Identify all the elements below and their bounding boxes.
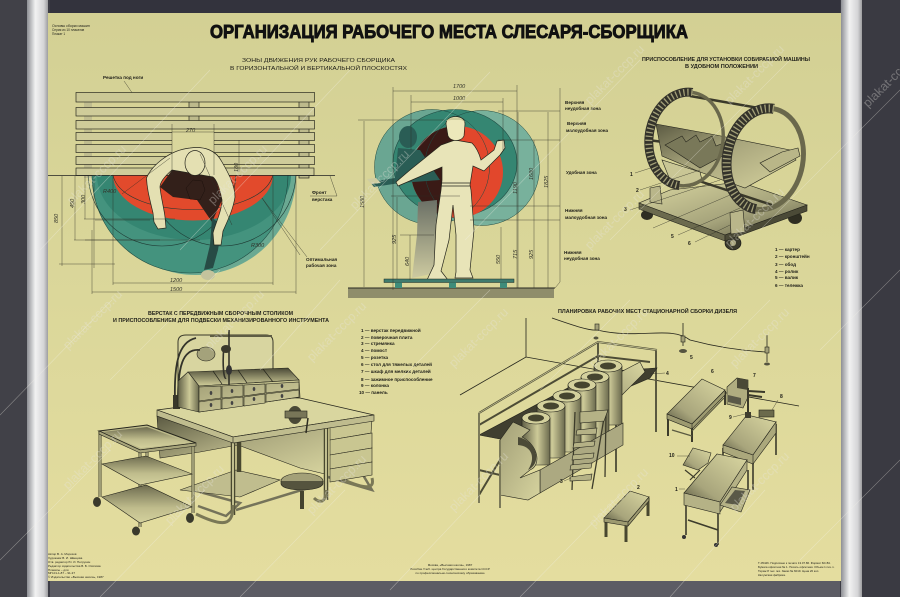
tool hoses bbox=[175, 338, 200, 400]
heading: workbench: ВЕРСТАК С ПЕРЕДВИЖНЫМ СБОРОЧНЫМ СТОЛИКОМ bbox=[148, 311, 293, 317]
legend: workbench parts: 5 — розетка bbox=[361, 355, 389, 360]
callout numbers bbox=[624, 165, 740, 247]
table 1 mobile workbench bbox=[675, 454, 750, 547]
zone labels: Верхняя bbox=[567, 121, 587, 126]
zone labels: Верхняя bbox=[565, 100, 585, 105]
publisher note bottom center: Москва, «Высшая школа», 1987 bbox=[428, 563, 473, 567]
zone labels bbox=[564, 100, 609, 261]
website watermarks: plakat-cccp.ru bbox=[347, 147, 412, 212]
vertical plane dimensions: 640 bbox=[405, 256, 411, 266]
legend: fixture parts: 6 — тележка bbox=[775, 283, 803, 288]
website watermarks: plakat-cccp.ru bbox=[727, 305, 792, 370]
assembly platform frame, back bbox=[479, 342, 657, 472]
website watermarks: plakat-cccp.ru bbox=[60, 427, 125, 492]
print data bottom right: Бумага офсетная № 1. Печать офсетная. Объем 1 печ.л. bbox=[758, 565, 835, 569]
parts bin cabinet bbox=[188, 368, 299, 386]
stepladder bbox=[560, 410, 608, 490]
website watermarks: plakat-cccp.ru bbox=[727, 449, 792, 514]
publisher note bottom center bbox=[410, 563, 490, 575]
vertical plane dimensions: 1700 bbox=[453, 84, 466, 90]
callout numbers: 2 bbox=[636, 188, 639, 194]
horizontal plane dimensions: 450 bbox=[70, 198, 76, 208]
platform and floor bbox=[348, 279, 555, 298]
walls floor and power cable: 5 bbox=[690, 355, 693, 361]
suspended power tool bbox=[223, 330, 229, 385]
label: workbench front bbox=[310, 176, 337, 202]
left hoop bbox=[643, 87, 729, 191]
legend: workbench parts: 1 — верстак передвижной bbox=[361, 327, 421, 333]
table top bbox=[157, 397, 374, 437]
legend: fixture parts bbox=[775, 247, 810, 288]
floor rails bbox=[198, 470, 372, 516]
credits bottom left: Художник В. И. Швецова bbox=[48, 556, 83, 560]
zone labels: Удобная зона bbox=[566, 169, 597, 175]
website watermarks: plakat-cccp.ru bbox=[586, 305, 651, 370]
legend: workbench parts: 6 — стол для тяжелых деталей bbox=[361, 361, 432, 367]
label: optimal working zone: Оптимальная bbox=[306, 257, 337, 262]
website watermarks: plakat-cccp.ru bbox=[205, 142, 270, 207]
vertical plane dimensions: 1000 bbox=[453, 96, 466, 102]
table 8 with column 9 and clamp: 8 bbox=[780, 394, 783, 400]
horizontal plane dimensions: 180 bbox=[234, 162, 240, 172]
legend: workbench parts: 10 — панель bbox=[359, 390, 388, 395]
workbench bbox=[157, 330, 374, 523]
heading: fixture: ПРИСПОСОБЛЕНИЕ ДЛЯ УСТАНОВКИ СОБИРАЕМОЙ МАШИНЫ bbox=[642, 55, 810, 63]
zone circles bbox=[374, 110, 540, 230]
credits bottom left: Редактор издательства В. Б. Осипова bbox=[48, 564, 101, 568]
legend: workbench parts: 8 — зажимное приспособление bbox=[361, 376, 433, 382]
assembly platform rails, front: 4 bbox=[666, 371, 669, 377]
cabinet 7 for small parts bbox=[727, 373, 756, 408]
horizontal plane dimensions: R400 bbox=[103, 189, 117, 195]
stepladder: 3 bbox=[560, 479, 563, 485]
series caption top left: Плакат 1 bbox=[52, 32, 65, 36]
horizontal plane dimensions: 1500 bbox=[170, 287, 183, 293]
cabinet 7 for small parts: 7 bbox=[753, 373, 756, 379]
zone labels: неудобная зона bbox=[564, 255, 600, 261]
vertical plane dimensions: 715 bbox=[513, 249, 519, 259]
heading: zones of arm movement bbox=[230, 58, 407, 72]
website watermarks: plakat-cccp.ru bbox=[60, 287, 125, 352]
callout numbers: 1 bbox=[630, 172, 633, 178]
vertical plane dimensions: 550 bbox=[496, 254, 502, 264]
zone labels: малоудобная зона bbox=[565, 214, 608, 220]
series caption top left: Основы сборки машин bbox=[52, 24, 90, 28]
panel: arm movement zones, vertical plane bbox=[348, 84, 609, 298]
vertical plane dimensions: 925 bbox=[529, 249, 535, 259]
callout numbers: 5 bbox=[671, 234, 674, 240]
worker seen from the back bbox=[396, 116, 505, 280]
horizontal plane dimensions: R300 bbox=[251, 243, 265, 249]
print data bottom right bbox=[758, 561, 835, 577]
heading: zones of arm movement: ЗОНЫ ДВИЖЕНИЯ РУК РАБОЧЕГО СБОРЩИКА bbox=[242, 58, 395, 64]
website watermarks: plakat-cccp.ru bbox=[64, 142, 129, 207]
diesel cylinders bbox=[522, 360, 622, 465]
publisher note bottom center: Пособие Учеб. центра Государственного комитета СССР bbox=[410, 567, 490, 571]
panel: workbench with mobile table bbox=[93, 311, 433, 536]
heading: layout: ПЛАНИРОВКА РАБОЧИХ МЕСТ СТАЦИОНАРНОЙ СБОРКИ ДИЗЕЛЯ bbox=[558, 307, 737, 315]
walls floor and power cable bbox=[460, 318, 799, 406]
credits bottom left bbox=[48, 552, 104, 579]
panel 10 bbox=[669, 448, 711, 480]
heading: workbench: И ПРИСПОСОБЛЕНИЕМ ДЛЯ ПОДВЕСКИ МЕХАНИЗИРОВАННОГО ИНСТРУМЕНТА bbox=[113, 318, 329, 324]
zone labels: малоудобная зона bbox=[566, 127, 609, 133]
website watermarks: plakat-cccp.ru bbox=[446, 449, 511, 514]
website watermarks: plakat-cccp.ru bbox=[202, 287, 267, 352]
vertical plane dimensions: 1580 bbox=[360, 195, 366, 208]
panel: layout of diesel assembly workplaces bbox=[460, 307, 799, 547]
label: foot grating bbox=[103, 75, 143, 94]
stool bbox=[281, 473, 323, 489]
series caption top left: Серия из 10 плакатов bbox=[52, 28, 85, 32]
vertical plane dimensions bbox=[358, 84, 560, 290]
website watermarks: plakat-cccp.ru bbox=[722, 42, 787, 107]
right hoop bbox=[719, 102, 811, 216]
legend: fixture parts: 2 — кронштейн bbox=[775, 253, 810, 259]
website watermarks: plakat-cccp.ru bbox=[582, 187, 647, 252]
website watermarks: plakat-cccp.ru bbox=[586, 465, 651, 530]
legend: workbench parts: 3 — стремянка bbox=[361, 341, 395, 346]
heading: workbench bbox=[113, 311, 329, 324]
label: optimal working zone bbox=[262, 198, 337, 268]
series caption top left bbox=[52, 24, 90, 36]
horizontal plane dimensions: 300 bbox=[81, 194, 87, 204]
website watermarks: plakat-cccp.ru bbox=[304, 299, 369, 364]
heading: zones of arm movement: В ГОРИЗОНТАЛЬНОЙ И ВЕРТИКАЛЬНОЙ ПЛОСКОСТЯХ bbox=[230, 64, 407, 72]
drum rods and bed bbox=[648, 96, 800, 205]
panel: arm movement zones, horizontal plane bbox=[48, 58, 407, 294]
assembly platform rails, front bbox=[479, 342, 669, 508]
worker silhouette shadow bbox=[367, 126, 440, 278]
heading: fixture bbox=[642, 55, 810, 70]
legend: fixture parts: 4 — ролик bbox=[775, 269, 799, 274]
publisher note bottom center: по профессионально-техническому образованию bbox=[416, 571, 485, 575]
label: workbench front: верстака bbox=[312, 197, 333, 202]
legend: workbench parts: 7 — шкаф для мелких деталей bbox=[361, 368, 431, 374]
legend: workbench parts bbox=[359, 327, 433, 395]
zone labels: неудобная зона bbox=[565, 105, 601, 111]
print data bottom right: Т-05446. Подписано к печати 13.07.86. Формат 60×84. bbox=[758, 561, 831, 565]
credits bottom left: МП-01-1-87 – 91-37 bbox=[48, 571, 75, 575]
vertical plane dimensions: 925 bbox=[392, 234, 398, 244]
website watermarks: plakat-cccp.ru bbox=[304, 452, 369, 517]
heading: fixture: В УДОБНОМ ПОЛОЖЕНИИ bbox=[685, 64, 758, 70]
legend: workbench parts: 2 — поверочная плита bbox=[361, 335, 413, 340]
pedestal body bbox=[157, 416, 325, 474]
panel: fixture for positioning the machine bbox=[624, 55, 811, 288]
zone semicircles bbox=[88, 175, 296, 275]
table 8 with column 9 and clamp: 9 bbox=[729, 415, 732, 421]
bench 2 surface plate bbox=[604, 485, 649, 542]
callout numbers: 6 bbox=[688, 241, 691, 247]
zone labels: Нижняя bbox=[564, 250, 582, 255]
bench 2 surface plate: 2 bbox=[637, 485, 640, 491]
table 6 for heavy parts bbox=[667, 369, 725, 442]
website watermarks: plakat-cccp.ru bbox=[722, 185, 787, 250]
credits bottom left: Отв. редактор Ю. И. Петрунин bbox=[48, 560, 91, 564]
horizontal plane dimensions: 270 bbox=[185, 128, 196, 134]
label: workbench front: Фронт bbox=[312, 190, 327, 195]
table 8 with column 9 and clamp bbox=[723, 388, 783, 490]
label: optimal working zone: рабочая зона bbox=[306, 262, 337, 268]
legend: fixture parts: 3 — обод bbox=[775, 261, 796, 267]
website watermarks: plakat-cccp.ru bbox=[446, 305, 511, 370]
legend: workbench parts: 4 — помост bbox=[361, 348, 388, 353]
legend: fixture parts: 5 — валик bbox=[775, 275, 799, 280]
bench vise bbox=[288, 406, 302, 424]
cart base with wheels bbox=[639, 182, 807, 250]
legend: workbench parts: 9 — колонка bbox=[361, 383, 389, 388]
horizontal plane dimensions: 850 bbox=[54, 213, 60, 223]
website watermarks: plakat-cccp.ru bbox=[582, 42, 647, 107]
horizontal plane dimensions: 1200 bbox=[170, 278, 183, 284]
foot grating slats bbox=[76, 92, 314, 178]
credits bottom left: Плакаты – для bbox=[48, 568, 69, 572]
table 6 for heavy parts: 6 bbox=[711, 369, 714, 375]
callout numbers: 3 bbox=[624, 207, 627, 213]
panel 10: 10 bbox=[669, 453, 675, 459]
diesel block bbox=[500, 422, 623, 500]
back panel bbox=[178, 335, 273, 385]
print data bottom right: Тираж 8 тыс. экз. Заказ № 6019. Цена 20 коп. bbox=[758, 569, 819, 573]
legend: fixture parts: 1 — картер bbox=[775, 247, 800, 252]
table 1 mobile workbench: 1 bbox=[675, 487, 678, 493]
title: ОРГАНИЗАЦИЯ РАБОЧЕГО МЕСТА СЛЕСАРЯ-СБОРЩИКА bbox=[210, 22, 688, 42]
vertical plane dimensions: 1190 bbox=[513, 181, 519, 194]
zone labels: Нижняя bbox=[565, 208, 583, 213]
drawers bbox=[330, 419, 372, 482]
vertical plane dimensions: 1825 bbox=[544, 175, 550, 188]
website watermarks: plakat-cccp.ru bbox=[162, 462, 227, 527]
vertical plane dimensions: 1680 bbox=[529, 167, 535, 180]
table legs bbox=[233, 425, 326, 515]
credits bottom left: Автор В. А. Морозов bbox=[48, 552, 77, 556]
horizontal plane dimensions bbox=[54, 124, 300, 294]
credits bottom left: © Издательство «Высшая школа», 1987 bbox=[48, 575, 104, 579]
label: foot grating: Решетка под ноги bbox=[103, 75, 143, 80]
front edge of workbench bbox=[48, 174, 335, 176]
worker seen from above bbox=[146, 148, 235, 280]
mobile table bbox=[93, 425, 196, 536]
print data bottom right: Калужская фабрика. bbox=[758, 573, 786, 577]
